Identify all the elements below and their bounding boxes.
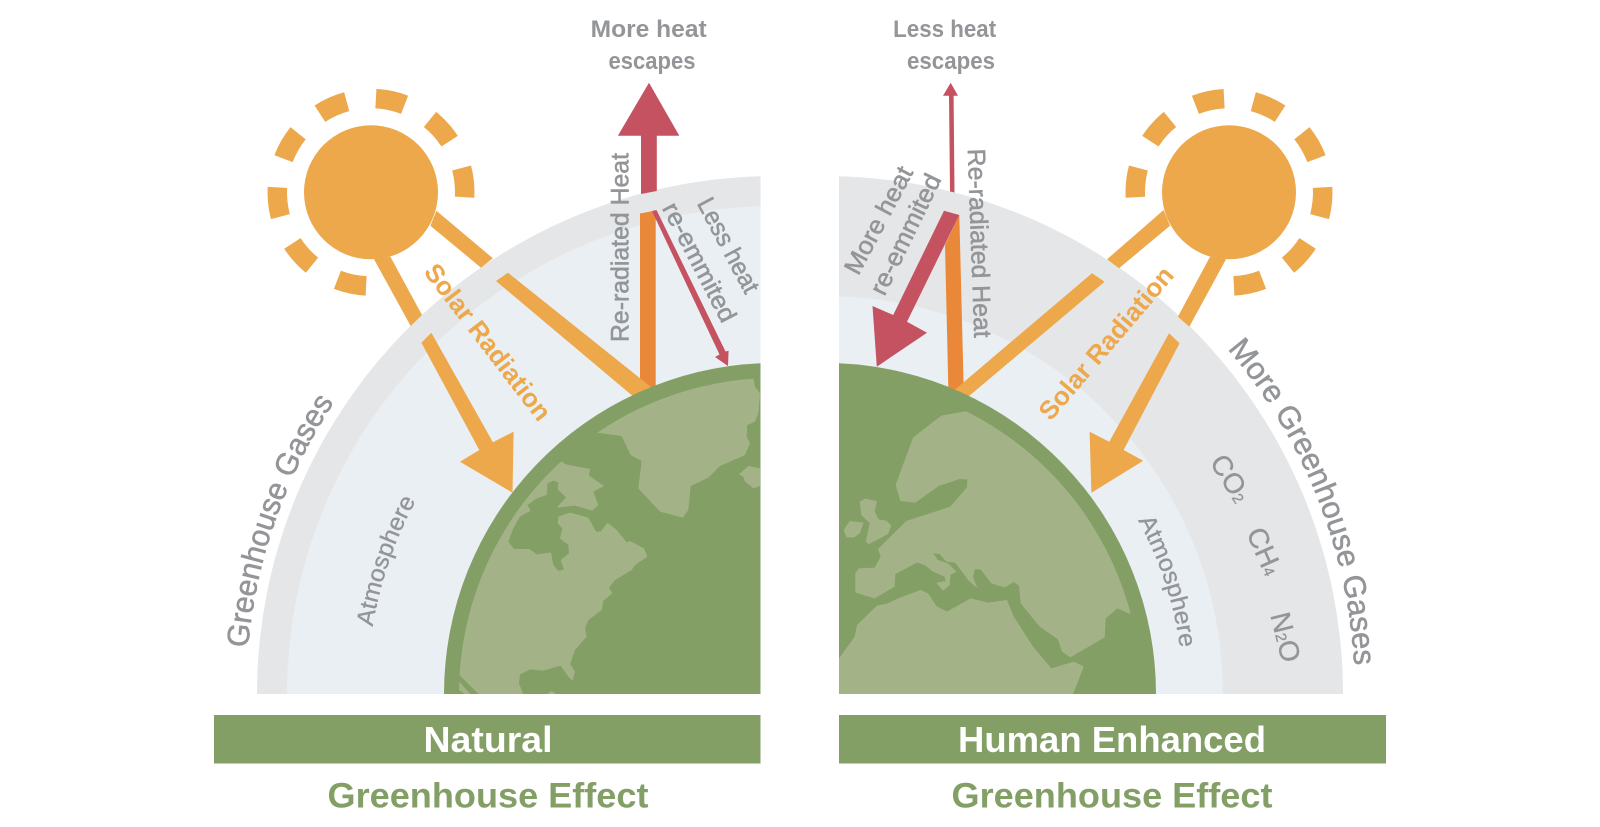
atmosphere layer: [839, 296, 1223, 694]
label: CH4: CH4: [1240, 523, 1289, 580]
arrow: solar radiation incoming: [374, 257, 514, 493]
arrow: more heat re-emitted: [872, 211, 959, 367]
bar label: human enhanced: Human Enhanced: [958, 719, 1266, 760]
label: more heat: More heat: [839, 162, 919, 279]
greenhouse gas layer: [839, 176, 1343, 694]
label: atmosphere: Atmosphere: [1138, 518, 1192, 646]
arrow: solar radiation reflected: [945, 210, 1170, 402]
arrow: less heat escapes: [943, 83, 958, 192]
title bar: human enhanced: [839, 715, 1386, 764]
atmosphere layer: [287, 206, 760, 694]
sun: [1135, 99, 1323, 286]
label: less heat: Less heat: [691, 193, 765, 298]
label: CO2: CO2: [1204, 449, 1257, 508]
arrow: less heat re-emitted: [652, 210, 729, 366]
panel: natural greenhouse effect: [214, 16, 765, 816]
earth: [839, 363, 1156, 694]
label: solar radiation: Solar Radiation: [418, 258, 558, 426]
label: less heat escapes: Less heat: [893, 16, 996, 43]
label: re-radiated heat: Re-radiated Heat: [962, 148, 996, 338]
label: more greenhouse gases: More Greenhouse Gases: [1228, 337, 1371, 664]
subtitle: greenhouse effect: Greenhouse Effect: [952, 776, 1273, 816]
panel: human enhanced greenhouse effect: [839, 16, 1386, 816]
land: north america and greenland: [459, 378, 760, 694]
label: re-radiated heat: Re-radiated Heat: [606, 153, 634, 342]
subtitle: greenhouse effect: Greenhouse Effect: [328, 776, 649, 816]
earth: [444, 363, 760, 694]
arrow: re-radiated heat (orange): [640, 210, 656, 400]
sun: [277, 99, 465, 286]
arrow: re-radiated heat (orange): [945, 215, 964, 400]
label: atmosphere: Atmosphere: [357, 497, 414, 627]
title bar: natural: [214, 715, 760, 764]
greenhouse gas layer: [257, 176, 760, 694]
label: less heat escapes: escapes: [907, 48, 995, 75]
label: re-emmited: re-emmited: [865, 169, 947, 299]
label: re-emmited: re-emmited: [656, 198, 742, 327]
label: greenhouse gases: Greenhouse Gases: [227, 396, 332, 646]
label: more heat escapes: More heat: [591, 16, 707, 43]
arrow: more heat escapes: [618, 83, 679, 194]
label: N2O: N2O: [1264, 609, 1307, 665]
label: more heat escapes: escapes: [608, 48, 696, 75]
land: europe and africa: [839, 411, 1130, 694]
label: solar radiation: Solar Radiation: [1032, 260, 1180, 426]
arrow: solar radiation reflected: [430, 211, 656, 403]
bar label: natural: Natural: [424, 719, 552, 760]
arrow: solar radiation incoming: [1090, 257, 1226, 493]
